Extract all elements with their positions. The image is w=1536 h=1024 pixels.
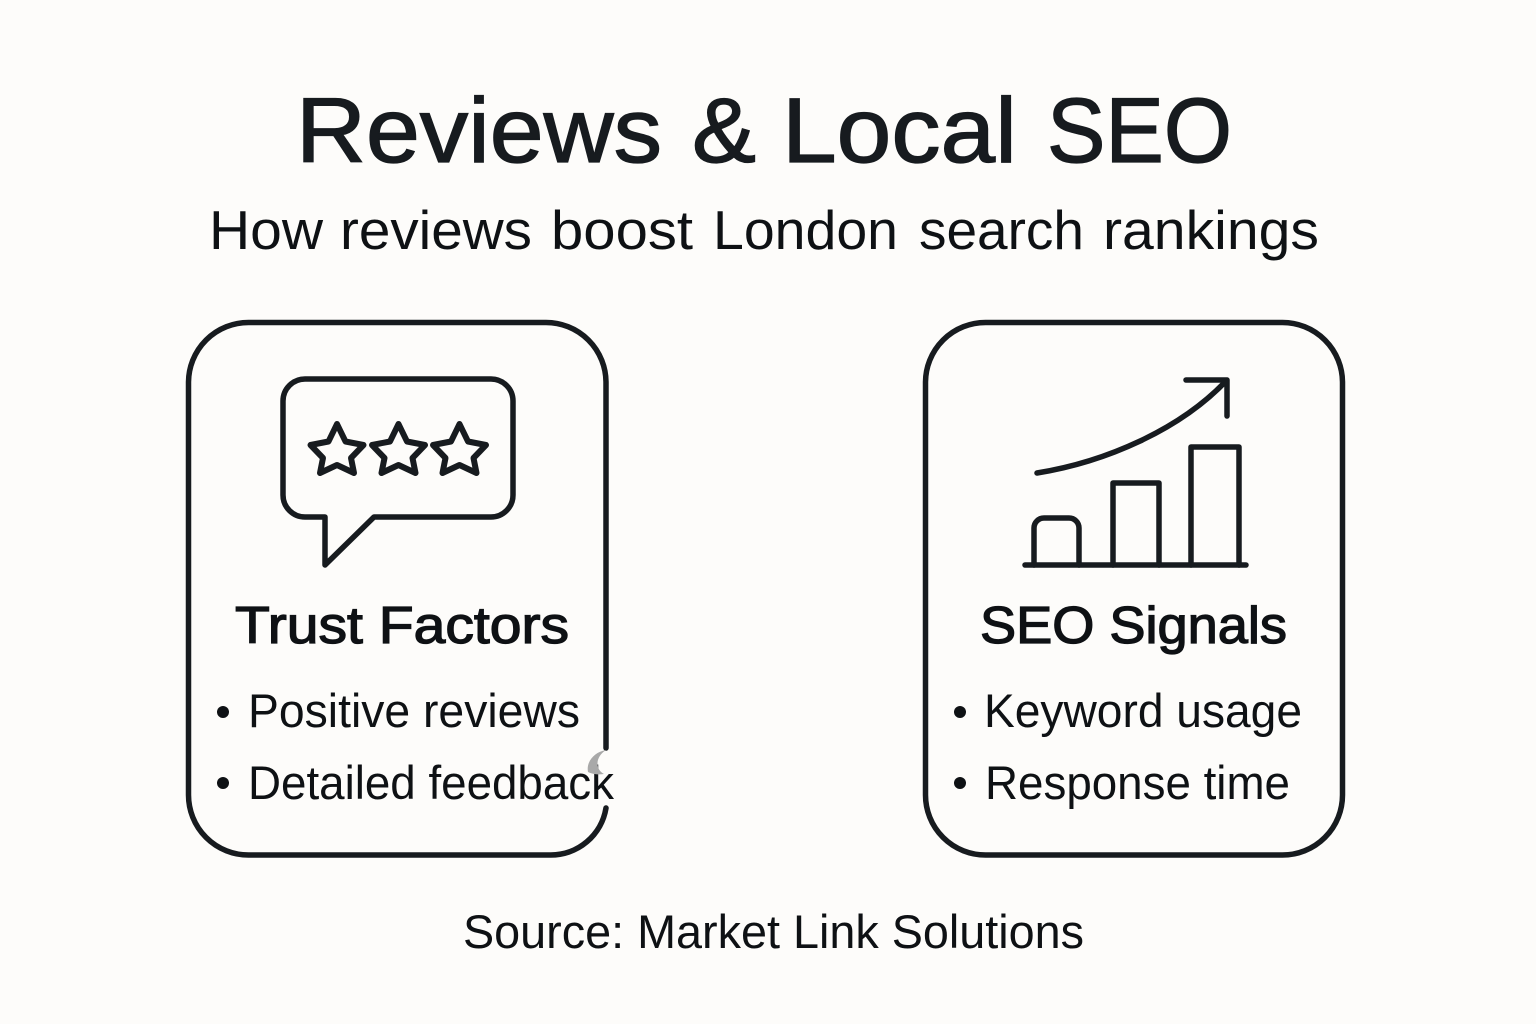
- speech bubble: [283, 379, 513, 565]
- bar 1: [1034, 518, 1079, 565]
- panel: seo signals: [926, 322, 1342, 855]
- heading: seo signals: SEO Signals: [980, 597, 1287, 655]
- title: Local: [782, 80, 1017, 182]
- subtitle: London: [713, 199, 898, 261]
- panel outline: [926, 322, 1342, 855]
- star 3: [433, 424, 486, 473]
- subtitle: How: [209, 199, 323, 261]
- crescent artifact: [588, 750, 606, 774]
- subtitle: reviews: [340, 199, 532, 261]
- subtitle: rankings: [1103, 199, 1319, 261]
- heading: trust factors: Trust Factors: [235, 597, 569, 655]
- icon: speech bubble with three stars: [283, 379, 513, 565]
- subtitle: [209, 199, 1319, 261]
- bullet: positive reviews: Positive reviews: [248, 684, 580, 737]
- source line: Source: Market Link Solutions: [463, 905, 1084, 958]
- bar 2: [1113, 483, 1159, 565]
- bullet: keyword usage: Keyword usage: [984, 684, 1302, 737]
- icon: rising bar chart with arrow: [1025, 380, 1246, 565]
- title: SEO: [1047, 80, 1232, 182]
- star 2: [372, 424, 425, 473]
- title: Reviews: [296, 80, 662, 182]
- subtitle: boost: [551, 199, 693, 261]
- title: [296, 80, 1232, 182]
- growth arrow: [1037, 380, 1227, 473]
- panel: trust factors: [188, 322, 614, 855]
- star 1: [310, 424, 364, 473]
- bullet list: seo signals: [954, 684, 1302, 809]
- bullet: response time: Response time: [985, 756, 1290, 809]
- subtitle: search: [919, 199, 1084, 261]
- bullet list: trust factors: [217, 684, 614, 809]
- panel outline: [188, 322, 606, 855]
- baseline: [1025, 562, 1246, 568]
- bullet: detailed feedback: Detailed feedback: [248, 756, 614, 809]
- title: &: [692, 80, 756, 182]
- bar 3: [1191, 447, 1239, 565]
